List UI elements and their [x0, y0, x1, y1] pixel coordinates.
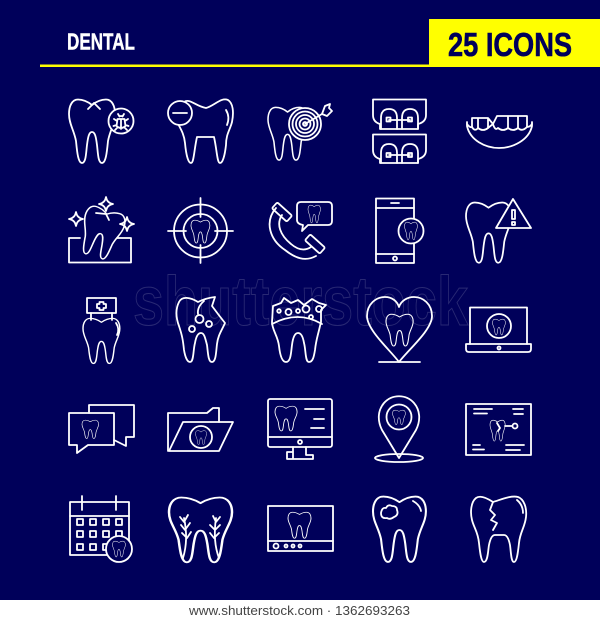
- icon: location pin with tooth: [375, 396, 423, 462]
- footer credit: www.shutterstock.com · 1362693263: [188, 604, 410, 618]
- icon: mobile with tooth: [376, 198, 424, 263]
- icon: tooth with target: [268, 104, 332, 160]
- icon: chat bubbles with tooth: [69, 405, 134, 453]
- icon: tooth with cavity: [373, 497, 426, 562]
- icon: braces: [373, 100, 426, 163]
- icon: shiny tooth in gum: [69, 197, 134, 262]
- icon: tooth in crosshair: [168, 198, 233, 263]
- icon: dental x-ray: [466, 404, 531, 455]
- badge: 25 icons: 25 ICONS: [448, 26, 572, 63]
- icon: phone call with tooth bubble: [270, 202, 332, 259]
- icon: laptop with tooth: [466, 308, 531, 352]
- badge: 25 icons: [429, 19, 600, 67]
- icon: folder with tooth: [168, 408, 233, 451]
- icon: denture: [467, 116, 532, 148]
- icon: decayed tooth: [176, 297, 225, 362]
- icon: calendar with tooth: [70, 496, 132, 562]
- footer strip: [0, 600, 600, 620]
- icon: screen with tooth: [268, 506, 333, 551]
- header rule: [40, 64, 430, 67]
- icon: tooth with rough crown: [272, 298, 326, 362]
- icon: tooth with minus: [168, 99, 233, 163]
- icon: cracked tooth: [471, 497, 526, 562]
- icon: monitor with tooth record: [268, 399, 332, 459]
- icon: tooth with bug: [69, 100, 134, 163]
- icon: tooth in heart: [367, 297, 432, 362]
- icon: tooth with warning: [466, 199, 531, 263]
- icon: tooth with nerves: [169, 498, 232, 562]
- icon: tooth with medical cap: [83, 298, 120, 363]
- title: DENTAL: [67, 28, 135, 54]
- watermark: shutterstock: [133, 262, 468, 340]
